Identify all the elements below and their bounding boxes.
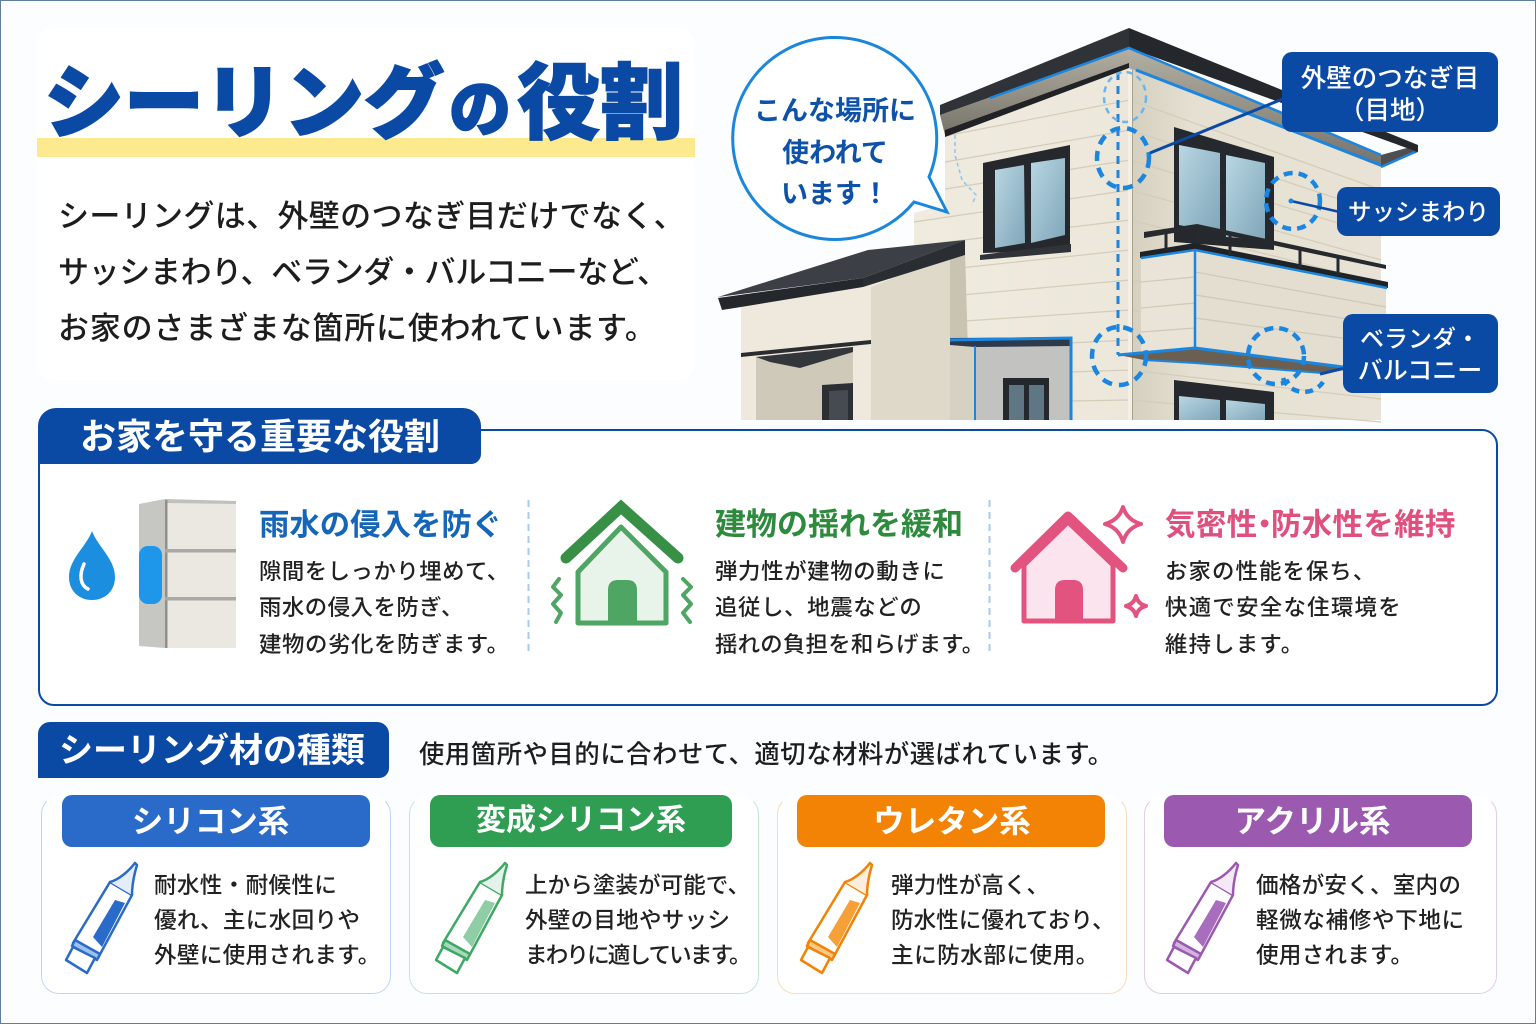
icon: wall with sealant bbox=[139, 499, 236, 648]
text block: rainwater: 雨水の侵入を防ぎ、 bbox=[259, 595, 464, 620]
window: upper left bbox=[983, 145, 1070, 253]
heading: modified silicone bbox=[430, 795, 732, 847]
heading: silicone: シリコン系 bbox=[132, 803, 289, 839]
speech bubble: います！ bbox=[781, 179, 889, 209]
text: silicone description bbox=[154, 873, 381, 968]
icon: green house with shaking marks bbox=[553, 507, 691, 623]
speech bubble: 使われて bbox=[782, 138, 888, 168]
text: silicone description: 優れ、主に水回りや bbox=[154, 908, 360, 933]
seal highlight: dashed joint markers bbox=[955, 72, 1323, 392]
title: の bbox=[449, 76, 511, 145]
house building bbox=[718, 28, 1418, 422]
intro text: サッシまわり、ベランダ・バルコニーなど、 bbox=[58, 255, 668, 290]
icon: orange tube bbox=[801, 863, 872, 973]
heading: important roles: お家を守る重要な役割 bbox=[80, 416, 440, 457]
text: modified silicone description: まわりに適しています。 bbox=[525, 943, 750, 968]
speech bubble bbox=[733, 37, 947, 239]
intro text: お家のさまざまな箇所に使われています。 bbox=[58, 311, 657, 346]
text block: rainwater: 隙間をしっかり埋めて、 bbox=[259, 559, 510, 584]
window: lower right bbox=[1174, 380, 1274, 420]
callout: around sash bbox=[1288, 187, 1500, 236]
panel: intro background bbox=[37, 28, 695, 380]
panel: important roles bbox=[38, 429, 1498, 706]
text block: airtightness: 気密性・防水性を維持 bbox=[1165, 508, 1456, 542]
text: silicone description: 耐水性・耐候性に bbox=[154, 873, 337, 898]
intro text: シーリングは、外壁のつなぎ目だけでなく、 bbox=[58, 199, 685, 234]
text: silicone description: 外壁に使用されます。 bbox=[154, 943, 381, 968]
text block: airtightness bbox=[1165, 508, 1456, 657]
text block: rainwater: 雨水の侵入を防ぐ bbox=[259, 508, 502, 542]
icon: purple tube bbox=[1167, 863, 1238, 973]
text: modified silicone description bbox=[525, 873, 750, 968]
text block: shake relief: 建物の揺れを緩和 bbox=[715, 507, 963, 542]
entrance bbox=[950, 338, 1071, 420]
card: silicone bbox=[41, 796, 391, 994]
heading: material types bbox=[38, 722, 389, 778]
text: urethane description: 弾力性が高く、 bbox=[891, 873, 1049, 898]
card: acrylic bbox=[1144, 796, 1497, 994]
title: 役割 bbox=[517, 57, 683, 150]
text: acrylic description: 使用されます。 bbox=[1256, 943, 1413, 968]
icon: water drop bbox=[69, 531, 115, 600]
text: urethane description bbox=[891, 873, 1115, 968]
icon: pink house with sparkles bbox=[1015, 507, 1146, 623]
text block: shake relief bbox=[715, 507, 984, 657]
callout: veranda and balcony: ベランダ・ bbox=[1360, 326, 1480, 353]
heading: important roles bbox=[38, 408, 481, 464]
heading: modified silicone: 変成シリコン系 bbox=[476, 804, 686, 837]
text block: airtightness: 快適で安全な住環境を bbox=[1165, 595, 1402, 620]
callout: outer wall joint: （目地） bbox=[1339, 97, 1441, 125]
text: urethane description: 防水性に優れており、 bbox=[891, 908, 1115, 933]
text: modified silicone description: 上から塗装が可能で、 bbox=[525, 873, 750, 898]
callout: outer wall joint: 外壁のつなぎ目 bbox=[1301, 65, 1479, 93]
title bbox=[37, 57, 695, 157]
icon: blue tube bbox=[66, 863, 137, 973]
text block: rainwater bbox=[259, 508, 510, 657]
material types intro text: 使用箇所や目的に合わせて、適切な材料が選ばれています。 bbox=[419, 741, 1114, 769]
callout: outer wall joint bbox=[1150, 52, 1498, 153]
text: modified silicone description: 外壁の目地やサッシ bbox=[525, 908, 730, 933]
heading: silicone bbox=[62, 795, 370, 847]
text block: airtightness: お家の性能を保ち、 bbox=[1165, 559, 1376, 584]
text: acrylic description: 価格が安く、室内の bbox=[1256, 873, 1461, 898]
card: urethane bbox=[777, 796, 1127, 994]
speech bubble: こんな場所に bbox=[754, 96, 916, 126]
heading: material types: シーリング材の種類 bbox=[59, 732, 365, 770]
title: シーリング bbox=[44, 59, 444, 148]
text block: shake relief: 追従し、地震などの bbox=[715, 595, 922, 620]
roof: upper bbox=[940, 48, 1129, 135]
intro text bbox=[58, 199, 685, 346]
text block: rainwater: 建物の劣化を防ぎます。 bbox=[259, 632, 510, 657]
text: acrylic description: 軽微な補修や下地に bbox=[1256, 908, 1465, 933]
heading: acrylic: アクリル系 bbox=[1235, 803, 1390, 839]
text block: shake relief: 弾力性が建物の動きに bbox=[715, 559, 945, 584]
card: modified silicone bbox=[409, 796, 759, 994]
balcony bbox=[1141, 250, 1195, 352]
callout: around sash: サッシまわり bbox=[1348, 199, 1489, 225]
callout: veranda and balcony: バルコニー bbox=[1358, 357, 1482, 385]
callout: veranda and balcony bbox=[1320, 314, 1498, 393]
roof: lower bbox=[718, 240, 965, 297]
text block: airtightness: 維持します。 bbox=[1165, 632, 1304, 657]
text block: shake relief: 揺れの負担を和らげます。 bbox=[715, 632, 984, 657]
heading: urethane: ウレタン系 bbox=[873, 803, 1031, 839]
window: upper right bbox=[1174, 127, 1274, 250]
icon: green tube bbox=[436, 863, 507, 973]
text: acrylic description bbox=[1256, 873, 1465, 968]
heading: acrylic bbox=[1164, 795, 1472, 847]
heading: urethane bbox=[797, 795, 1105, 847]
porch block bbox=[871, 255, 950, 420]
text: urethane description: 主に防水部に使用。 bbox=[891, 943, 1099, 968]
